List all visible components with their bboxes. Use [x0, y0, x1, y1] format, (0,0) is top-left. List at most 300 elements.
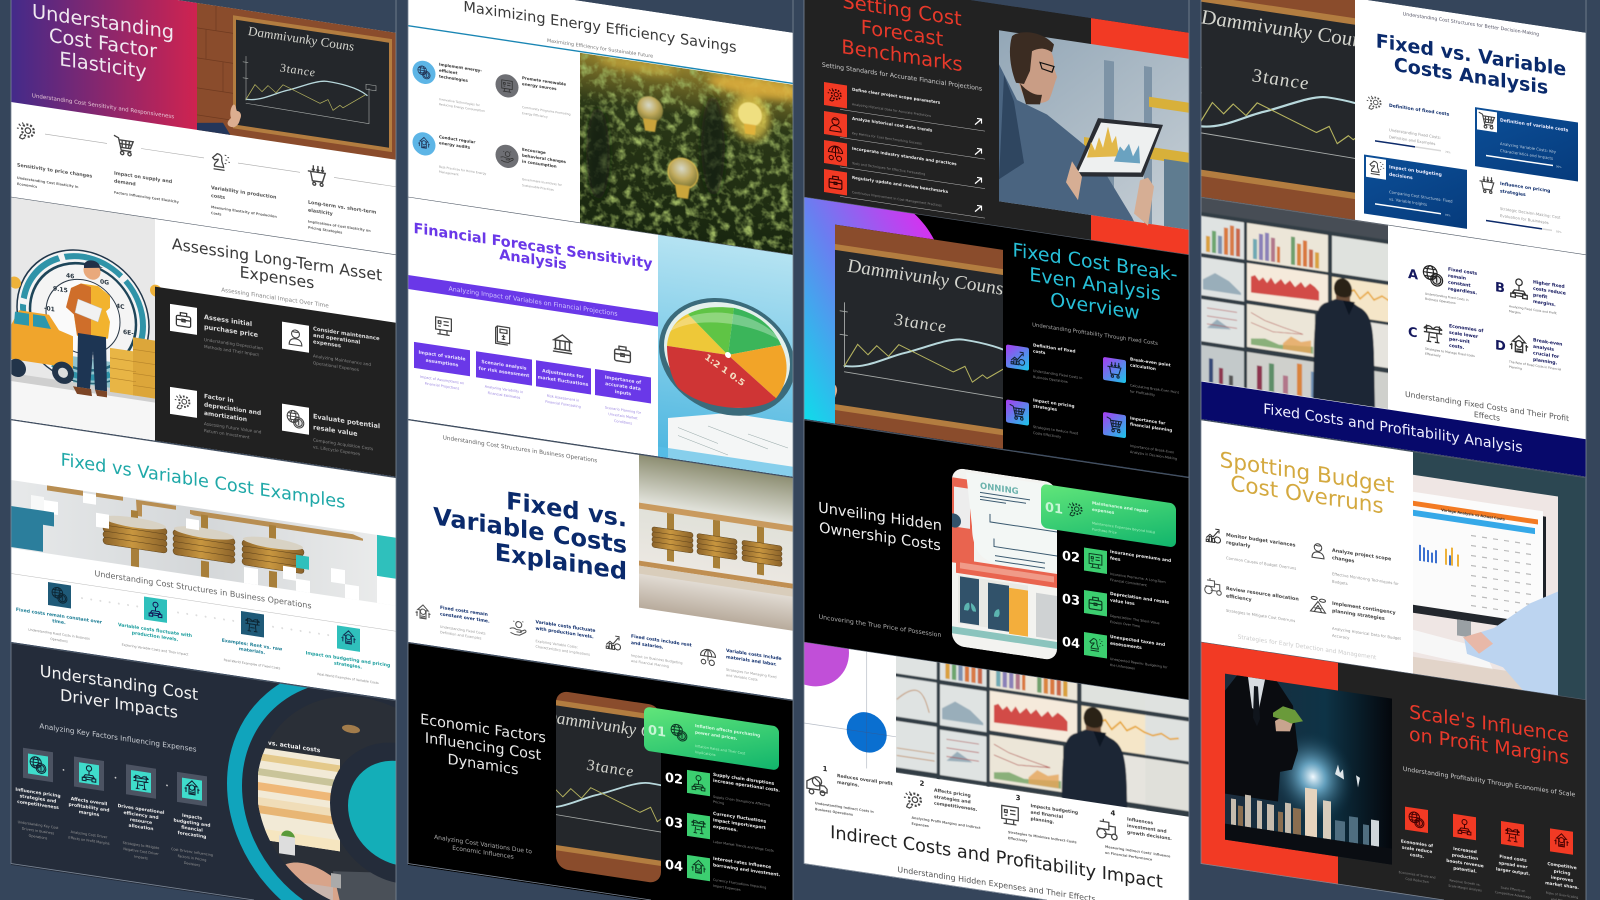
item: planning: Importance of Break-Even	[1130, 444, 1174, 455]
photo: analyst at dashboard wall	[1151, 190, 1451, 424]
title: Unveiling Hidden	[818, 499, 942, 535]
item 1	[17, 163, 92, 188]
item 4: accurate data	[605, 381, 641, 392]
item 4: Strategies for Managing Fixed	[726, 668, 777, 679]
card: pricing strategies	[1480, 176, 1562, 234]
item 03: expenses.	[713, 825, 738, 834]
card: fixed costs: 70%	[1445, 150, 1451, 155]
item A: constant	[1448, 280, 1471, 289]
timeline dots	[82, 598, 329, 635]
item 03: Currency fluctuations	[713, 811, 767, 825]
illustration: man, gauge, car and coins	[8, 197, 162, 442]
item 1: Impact of variable	[418, 350, 466, 363]
subtitle: Setting Standards for Accurate Financial Projections	[822, 62, 982, 93]
item 2	[114, 170, 180, 204]
item 2: margins	[79, 809, 100, 818]
title: Even Analysis	[1029, 263, 1161, 305]
photo: coins on wood frame	[639, 455, 793, 631]
item 3: Costs	[211, 211, 221, 217]
item 4: financial	[181, 825, 203, 834]
slide: Setting Cost Forecast Benchmarks	[804, 0, 1189, 255]
slide: Fixed Cost Break-Even Analysis Overview	[705, 155, 1189, 610]
item 3	[118, 763, 165, 863]
item: maintenance: Operational Expenses	[313, 360, 359, 372]
item 3: market fluctuations	[538, 374, 589, 388]
item D: analysis	[1533, 344, 1554, 353]
item 1: Fixed costs remain	[440, 605, 488, 618]
item B: Analyzing Fixed Costs and Profit	[1509, 304, 1557, 315]
photo: chalkboard rounded crop: 3tance	[586, 757, 633, 781]
item 1: Understanding Cost Elasticity in	[17, 176, 79, 189]
item 04: assessments	[1110, 640, 1142, 651]
item: maintenance: Consider maintenance	[313, 326, 380, 342]
item: energy audits: Best Practices for Home Energy	[439, 165, 486, 176]
item 04: 04	[665, 858, 683, 875]
item 03: Erosion Over Time	[1110, 620, 1140, 628]
item: behavioral changes: Encourage	[522, 147, 546, 155]
title: Cost Factor	[49, 24, 157, 63]
item 2: Scale Margin Analysis	[1448, 884, 1482, 893]
item 4: Real-World Examples of Variable Costs	[317, 672, 379, 685]
item: scope	[1312, 543, 1399, 594]
item 2: production levels.	[132, 630, 179, 643]
item 1: Understanding Fixed Costs in Business	[28, 628, 90, 641]
item A: Understanding Fixed Costs in	[1425, 292, 1469, 302]
item 3: Fixed costs	[1499, 854, 1527, 864]
item 3: Impacts budgeting	[1031, 803, 1078, 816]
item 3: Scale Effects on	[1501, 885, 1525, 893]
teal ring	[227, 684, 308, 900]
slide: Fixed Costs and Profitability Analysis	[1151, 190, 1586, 477]
item: definition: Business Operations	[1033, 375, 1068, 384]
item 2: Exploring Variable Costs:	[536, 639, 578, 649]
item 4: strategies.	[334, 660, 362, 671]
illustration: man, gauge, car and coins: 4C	[116, 303, 125, 311]
highlighted item 01	[644, 706, 779, 771]
item 3: materials.	[239, 646, 265, 656]
item 1: Sensitivity to price changes	[17, 162, 92, 180]
item 1: constant over time.	[440, 611, 490, 625]
item 1	[414, 314, 470, 392]
item 4: Long-term vs. short-term	[308, 200, 376, 216]
accent line	[408, 25, 793, 84]
item D: The Role of Fixed Costs in Financial	[1508, 360, 1561, 372]
item 4: forecasting	[178, 830, 206, 840]
item B: Higher fixed	[1533, 279, 1565, 290]
row 2: Key Metrics for Cost Benchmarking Success	[852, 131, 922, 146]
title: Financial Forecast Sensitivity	[414, 221, 653, 273]
slide: Fixed vs Variable Cost Examples	[11, 420, 396, 700]
item 02: Insurance premiums and	[1110, 549, 1171, 564]
item B: B	[1495, 280, 1505, 297]
title: Influencing Cost	[425, 731, 541, 764]
item 1	[807, 761, 894, 823]
item B	[1495, 274, 1566, 322]
item 4: growth decisions.	[1127, 829, 1172, 842]
item: renewable sources: Energy Efficiency	[522, 111, 548, 119]
item 2: Affects pricing	[934, 788, 971, 799]
item 1: Operations	[29, 834, 48, 840]
item: definition	[1006, 338, 1082, 386]
item: variances: Monitor budget variances	[1226, 532, 1296, 549]
item 1: assumptions	[426, 358, 459, 369]
item: purchase price: purchase price	[204, 323, 259, 339]
item 02: Insurance Premiums: A Long-Term	[1110, 572, 1166, 584]
item 4: Decisions	[184, 861, 200, 867]
title: Overview	[1050, 288, 1140, 324]
item: pricing	[1006, 393, 1078, 442]
item 3: Negative Cost Driver	[123, 847, 159, 856]
item 03: impact import/export	[713, 817, 766, 831]
photo: chalkboard: 3tance	[279, 60, 316, 80]
highlighted item 01: Inflation Rates and Their Cost	[695, 744, 746, 756]
item: resale value: vs. Lifecycle Expenses	[313, 444, 360, 456]
item: pricing: Strategies to Reduce Fixed	[1033, 425, 1078, 436]
subtitle: Understanding Cost Sensitivity and Responsiveness	[32, 93, 174, 120]
item: renewable sources: Promote renewable	[522, 75, 566, 87]
subtitle: Analyzing Cost Variations Due to	[434, 834, 532, 856]
item 3: Competitive Advantage	[1495, 890, 1531, 900]
item 4	[700, 644, 782, 686]
title: Benchmarks	[841, 35, 963, 76]
item 1	[416, 601, 490, 642]
item: behavioral changes: Sustainable Practices	[522, 183, 554, 192]
item 3: and Financial Planning	[631, 659, 669, 669]
item 3: resource	[130, 817, 152, 826]
inner teal disc	[348, 754, 452, 873]
item C	[1408, 317, 1484, 364]
item C: Effectively	[1425, 352, 1441, 358]
photo: budget dashboard on monitor: Variage Analysis vs Actual Costs	[1441, 508, 1505, 522]
item 1: scale reduce	[1402, 845, 1432, 855]
item 2: Effects on Profit Margins	[68, 836, 110, 846]
item: energy technologies: technologies	[439, 74, 468, 83]
item 3: 3	[1016, 793, 1021, 802]
item: variances	[1206, 528, 1296, 571]
slide: Understanding Cost Driver Impacts	[11, 644, 396, 900]
slide: Unveiling Hidden Ownership Costs	[804, 420, 1189, 700]
item: purchase price	[170, 304, 263, 358]
item 2: for risk assessment	[479, 366, 530, 379]
subtitle: Effects	[1474, 410, 1500, 423]
item: resources: Review resource allocation	[1226, 586, 1299, 603]
photo: forest with glowing bulbs	[580, 50, 808, 257]
item 1: Economies of	[1401, 839, 1433, 849]
row 4: Continuous Improvement in Cost Management Practices	[852, 190, 942, 208]
item 2: Scenario analysis	[481, 359, 527, 372]
item 3	[211, 186, 276, 218]
item 04: 04	[1062, 635, 1080, 652]
photo: businessman and coin city	[1225, 674, 1392, 865]
item 4	[1097, 806, 1172, 865]
item: behavioral changes: Government Incentives for	[522, 177, 563, 187]
item 2: strategies and	[934, 794, 971, 806]
item D: crucial for	[1533, 350, 1560, 360]
item 2	[510, 615, 595, 658]
item 2: 2	[920, 778, 925, 788]
row 3: Tools and Techniques for Effective Forecasting	[851, 161, 925, 176]
photo: chalkboard	[1046, 0, 1558, 390]
item 03: Labor Market Trends and Wage Costs	[713, 840, 774, 853]
row 1	[824, 82, 941, 123]
item: maintenance	[282, 322, 380, 375]
item: resources	[1205, 577, 1299, 624]
photo: chalkboard: Dammivunky Couns	[247, 23, 354, 54]
title: Explained	[495, 538, 627, 586]
highlighted item 01: 01	[1045, 500, 1063, 518]
item 4: Measuring Indirect Costs' Influence	[1105, 845, 1171, 859]
item 1: Understanding Indirect Costs in	[815, 801, 874, 814]
item 2	[476, 323, 532, 402]
section subtitle: Understanding Cost Structures in Business Operations	[94, 569, 312, 611]
inner dark circle	[330, 768, 396, 882]
photo: budget dashboard on monitor	[1413, 475, 1558, 696]
item: maintenance: Analyzing Maintenance and	[313, 353, 371, 367]
subtitle: Understanding Profitability Through Fixed Costs	[1032, 322, 1158, 347]
card: budgeting decisions: vs. Variable Insights	[1389, 196, 1427, 207]
illustration: man, gauge, car and coins: 6E-	[123, 329, 134, 337]
item: energy technologies: Innovative Technologies for	[439, 97, 481, 107]
item: definition: costs	[1033, 348, 1046, 355]
item 3	[1002, 791, 1078, 851]
item 3: and financial	[1031, 809, 1063, 820]
item 2: Analyzing Profit Margins and Indirect	[912, 816, 981, 830]
item 02: Financial Commitment	[1110, 578, 1148, 588]
item 2: competitiveness.	[934, 801, 978, 813]
subtitle: Analyzing Key Factors Influencing Expenses	[39, 721, 197, 754]
item 3	[606, 630, 693, 672]
item: scope: Effective Monitoring Techniques for	[1332, 571, 1399, 586]
card: variable costs	[1475, 107, 1578, 182]
item 1: margins.	[837, 779, 860, 789]
illustration: storefront and document: ONNING	[980, 481, 1019, 497]
item: renewable sources: Community Programs Promoting	[522, 105, 571, 116]
item 3: planning.	[1031, 816, 1055, 826]
item 1: Drivers in Business	[22, 827, 54, 836]
subtitle band: Analyzing Impact of Variables on Financial Projections	[448, 286, 618, 318]
item: contingency: Implement contingency	[1332, 601, 1396, 616]
item 02: Supply chain disruptions	[713, 772, 775, 787]
item 1: Fixed costs remain constant over	[16, 607, 103, 626]
item 3: Financial Forecasting	[545, 400, 581, 409]
item: depreciation: depreciation and	[204, 401, 261, 417]
slide: Assessing Long-Term Asset Expenses	[8, 197, 396, 477]
item: break-even: calculation	[1130, 362, 1156, 371]
gradient title panel	[11, 0, 197, 130]
item 2: profitability and	[69, 802, 109, 814]
item B: profit	[1533, 292, 1548, 301]
item A: A	[1408, 267, 1419, 284]
item 1: Influences pricing	[15, 787, 61, 799]
item: behavioral changes: in consumption	[522, 159, 557, 169]
item 04: Import Expenses	[713, 884, 741, 892]
photo: budget table and laptop	[258, 724, 396, 900]
item 03: value loss	[1110, 597, 1135, 607]
item 2: Factors Influencing Cost Elasticity	[114, 190, 180, 204]
item 1	[1399, 806, 1435, 885]
item 3: Risk Assessment in	[547, 394, 579, 403]
title: Spotting Budget	[1220, 448, 1394, 499]
item A: remain	[1448, 273, 1466, 282]
connector dots	[63, 769, 168, 786]
title: Fixed Cost Break-	[1012, 238, 1178, 286]
photo: chalkboard: 3tance	[893, 309, 946, 337]
item 4: Competitive	[1547, 861, 1577, 871]
item 1: Understanding Fixed Costs:	[440, 625, 486, 636]
item 4: market share.	[1545, 880, 1579, 891]
item: energy audits: energy audits	[439, 140, 471, 150]
item: break-even: Break-even point	[1130, 356, 1171, 367]
title: Costs Analysis	[1394, 53, 1548, 99]
item: pricing: Costs Effectively	[1033, 431, 1061, 439]
slide: Indirect Costs and Profitability Impact	[771, 594, 1210, 900]
item 1: 1	[823, 764, 828, 774]
item: resale value: Evaluate potential	[313, 412, 380, 430]
item: depreciation: Return on Investment	[204, 428, 250, 440]
item 4: Factors in Pricing	[178, 854, 206, 862]
title: Forecast	[861, 16, 944, 51]
subtitle band	[408, 275, 658, 326]
item 4: Impacts	[182, 813, 202, 822]
item 4	[306, 625, 390, 684]
card: pricing strategies: Evaluation for Businesses	[1500, 213, 1549, 225]
item 3: Examples: Rent vs. raw	[222, 638, 283, 653]
item 1: competitiveness	[17, 799, 59, 811]
item C: Strategies to Manage Fixed Costs	[1425, 347, 1475, 358]
item 2: Variable costs fluctuate	[536, 619, 595, 634]
card: variable costs: Analyzing Variable Costs: Key	[1500, 141, 1557, 154]
item 02: increase operational costs.	[713, 778, 780, 794]
highlighted item 01: expenses	[1092, 507, 1115, 515]
item: pricing: strategies	[1033, 403, 1058, 412]
item 2: with production levels.	[536, 626, 594, 640]
highlighted item 01: Maintenance Expenses Beyond Initial	[1092, 521, 1155, 535]
item D: planning.	[1533, 357, 1558, 366]
item 4: investment and	[1127, 823, 1167, 835]
highlighted item 01: Inflation affects purchasing	[695, 723, 760, 738]
item 2: Characteristics and Implications	[536, 645, 590, 657]
slide: Economic Factors Influencing Cost Dynamics	[408, 615, 841, 900]
highlighted item 01: Implications	[695, 750, 716, 757]
item: planning: Importance for	[1130, 415, 1166, 426]
item 4: Variable costs include	[726, 648, 782, 662]
item: planning: Analysis in Decision-Making	[1130, 450, 1177, 461]
title: Economic Factors	[420, 712, 546, 747]
item 4: Pricing Strategies	[308, 226, 342, 235]
item: energy technologies: Implement energy-	[439, 62, 482, 73]
item: break-even	[1103, 352, 1180, 401]
item B: margins.	[1533, 299, 1556, 308]
red accent block	[1201, 642, 1338, 885]
card: variable costs: Definition of variable costs	[1500, 117, 1569, 134]
item: energy technologies: Reducing Energy Consumption	[439, 102, 485, 113]
title: Cost Overruns	[1230, 472, 1384, 519]
item: break-even: for Profitability	[1130, 389, 1155, 397]
photo: chalkboard: Dammivunky Couns	[846, 255, 1003, 300]
slide: Spotting Budget Cost Overruns	[1201, 420, 1586, 700]
gradient accent	[804, 197, 934, 438]
item C: Economies of	[1449, 323, 1484, 334]
item 3: allocation	[129, 823, 153, 832]
subtitle: Understanding Profitability Through Economies of Scale	[1403, 766, 1575, 799]
item 4: Influences	[1127, 816, 1153, 826]
item 2: Increased	[1453, 846, 1477, 855]
item 1: Understanding Key Cost	[18, 820, 59, 830]
card: budgeting decisions: Comparing Cost Structures: Fixed	[1389, 189, 1453, 204]
title: Expenses	[240, 262, 314, 292]
item 1: Definition and Examples	[440, 630, 482, 641]
item: depreciation: amortization	[204, 410, 247, 423]
item D: D	[1495, 338, 1506, 355]
item A: Fixed costs	[1448, 267, 1477, 277]
photo: gauge	[658, 234, 795, 477]
item: purchase price: Assess initial	[204, 313, 252, 328]
photo: chalkboard: Dammivunky Couns	[1200, 4, 1371, 54]
item: scope: Budgets	[1332, 579, 1348, 586]
card: variable costs: Characteristics and Impacts	[1500, 148, 1553, 161]
item 4: 4	[1111, 808, 1116, 818]
title: Indirect Costs and Profitability Impact	[830, 822, 1163, 893]
item: resale value: resale value	[313, 423, 358, 438]
item: contingency: Accuracy	[1332, 633, 1350, 640]
item 3: Strategies to Mitigate	[123, 841, 159, 850]
item 1: Reduces overall profit	[837, 773, 894, 787]
item 2: Expenses	[912, 822, 929, 828]
item 3: efficiency and	[123, 810, 159, 821]
item 04	[665, 849, 780, 898]
item 4: Risks of Over-Scaling	[1546, 891, 1578, 900]
highlighted item 01: Purchase Price	[1092, 527, 1117, 535]
timeline icons	[17, 121, 325, 187]
title: Analysis	[499, 247, 567, 273]
slide: Fixed vs. Variable Costs Explained	[408, 420, 793, 700]
card: budgeting decisions	[1364, 154, 1467, 229]
item D	[1495, 332, 1562, 377]
item 2: Impact on supply and	[114, 170, 173, 185]
item 3	[222, 608, 283, 671]
item 4: Importance of	[605, 375, 642, 386]
subtitle: Assessing Financial Impact Over Time	[221, 288, 329, 310]
item: planning: financial planning	[1130, 421, 1172, 433]
row 3	[824, 140, 957, 183]
item 1: costs.	[1410, 852, 1424, 860]
title: Understanding Cost	[40, 661, 198, 704]
item: depreciation: Factor in	[204, 393, 234, 404]
item: energy audits: Conduct regular	[439, 134, 475, 145]
item 2: boosts revenue	[1446, 858, 1484, 869]
item 04: Unexpected Repairs: Budgeting for	[1110, 657, 1168, 670]
item 4: and Variable Costs	[726, 673, 758, 682]
card: fixed costs: Definition and Examples	[1389, 134, 1435, 146]
item 1: Economics	[17, 182, 37, 189]
item 04	[1062, 627, 1168, 676]
item C: C	[1408, 325, 1418, 341]
item D: Planning	[1509, 365, 1522, 371]
item: renewable sources	[496, 71, 571, 122]
row 2	[824, 111, 933, 150]
item 3: and salaries.	[631, 640, 664, 651]
card: fixed costs: Definition of fixed costs	[1389, 103, 1450, 118]
item 2: Variable costs fluctuate with	[118, 622, 192, 639]
item 4	[171, 771, 213, 869]
title: Maximizing Energy Efficiency Savings	[463, 0, 737, 56]
item: resale value: Comparing Acquisition Costs	[313, 437, 373, 451]
highlighted item 01: 01	[648, 723, 666, 741]
eyebrow text: Understanding Cost Structures in Business Operations	[443, 435, 597, 464]
item: energy audits	[412, 130, 486, 181]
item 4: Scenario Planning for	[605, 406, 642, 415]
card: fixed costs	[1367, 95, 1451, 155]
